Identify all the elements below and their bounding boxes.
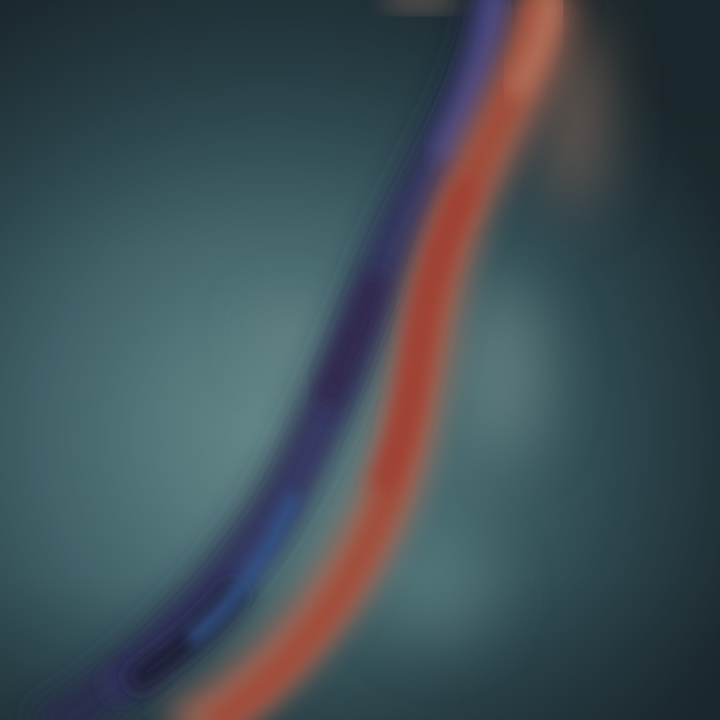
ribbon: red and orange	[180, 0, 552, 720]
glow: pale haze around the ribbons	[255, 10, 603, 645]
glow: warm haze at top edge	[380, 0, 460, 11]
ribbon: blue and purple	[40, 0, 497, 720]
